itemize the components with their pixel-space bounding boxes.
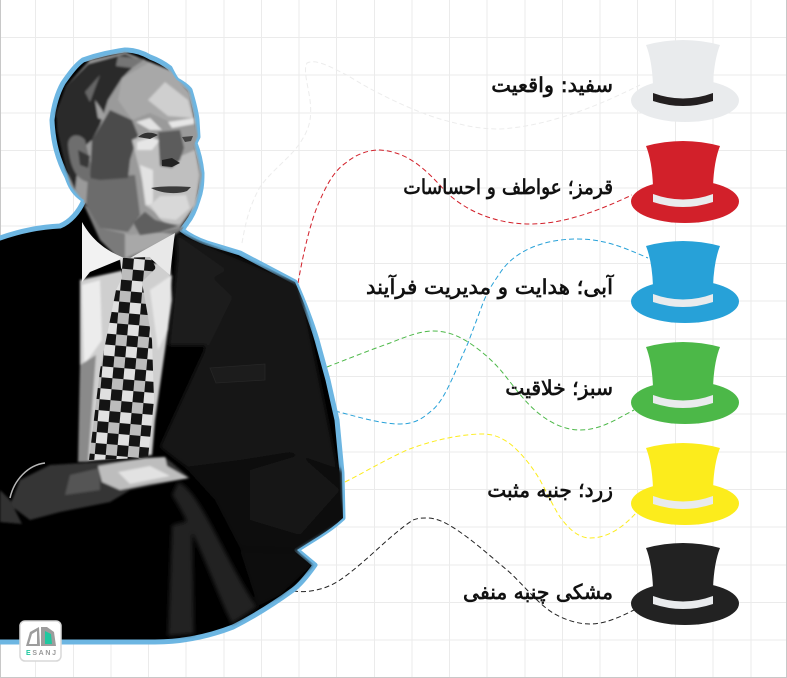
red hat — [631, 141, 739, 223]
label: red hat: قرمز؛ عواطف و احساسات — [403, 175, 613, 199]
eyes — [138, 133, 158, 139]
head — [56, 52, 202, 235]
forehead — [118, 62, 194, 122]
label: blue hat: آبی؛ هدایت و مدیریت فرآیند — [366, 274, 614, 299]
connector: red hat — [298, 150, 632, 283]
logo: ESANJ: ESANJ — [26, 650, 56, 657]
head base — [56, 52, 202, 235]
nose — [162, 158, 180, 167]
jacket pocket — [210, 364, 265, 383]
hair — [56, 54, 140, 190]
blue hat — [631, 241, 739, 323]
ear — [68, 135, 92, 182]
green hat — [631, 342, 739, 424]
collar — [82, 222, 124, 282]
label: green hat: سبز؛ خلاقیت — [505, 376, 613, 400]
chin shadow — [133, 212, 178, 235]
connector: green hat — [327, 331, 634, 430]
jacket and legs — [160, 232, 348, 636]
mouth — [151, 186, 191, 193]
shirt cuff — [10, 463, 45, 498]
label: black hat: مشکی چنبه منفی — [463, 580, 613, 604]
yellow hat — [631, 443, 739, 525]
connector: blue hat — [335, 239, 648, 424]
white hat — [631, 40, 739, 122]
dark cheek — [90, 110, 138, 180]
tie — [89, 257, 156, 460]
outline — [0, 50, 343, 642]
connector: black hat — [293, 518, 634, 624]
shirt — [78, 205, 185, 462]
portrait: man in suit with blue outline — [0, 50, 348, 642]
black hat — [631, 543, 739, 625]
label: yellow hat: زرد؛ جنبه مثبت — [487, 478, 613, 502]
brow highlight — [168, 118, 194, 128]
logo: ESANJ — [20, 621, 61, 661]
nose shadow — [158, 130, 184, 168]
label: white hat: سفید: واقعیت — [491, 73, 613, 97]
neck — [84, 205, 185, 262]
connector: white hat — [242, 62, 640, 243]
right face light — [132, 132, 199, 225]
connector: yellow hat — [345, 434, 637, 538]
hands — [0, 457, 190, 524]
lower jaw — [86, 175, 140, 232]
